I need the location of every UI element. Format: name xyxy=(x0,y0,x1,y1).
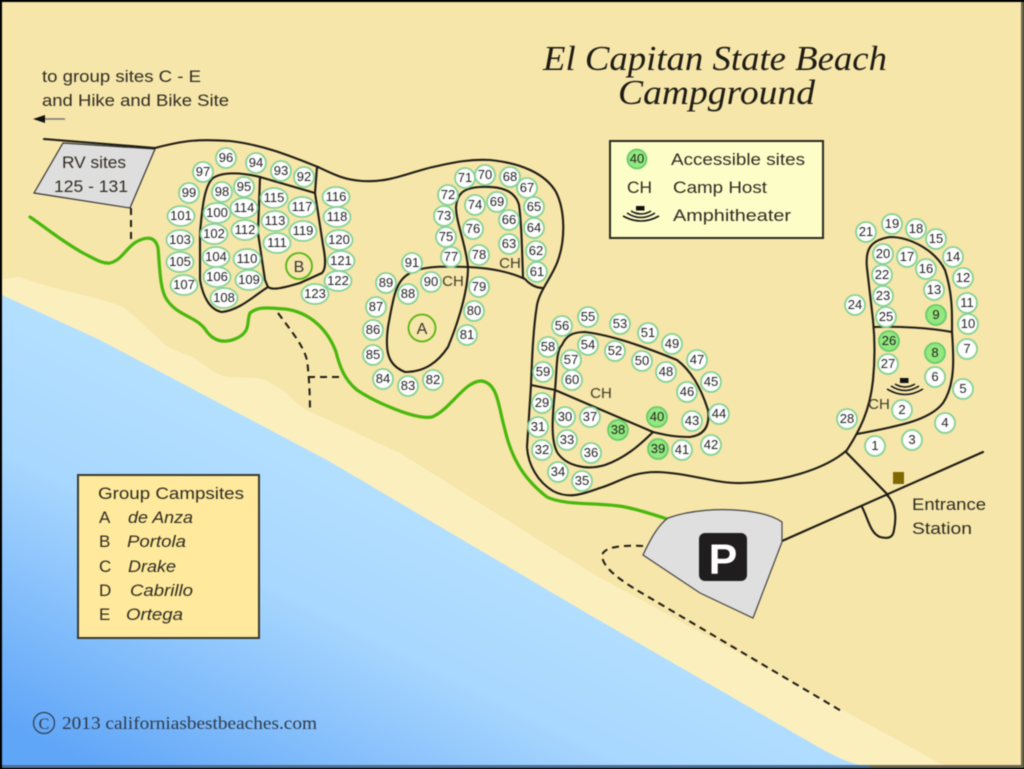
campsites east loop: 22 xyxy=(875,267,889,282)
icon: amphitheater on map xyxy=(887,378,923,394)
camp host labels: CH xyxy=(868,396,890,413)
campsites center loop: 40 xyxy=(650,409,664,424)
campsites east loop: 6 xyxy=(931,369,939,384)
campsites east loop: 7 xyxy=(963,341,971,356)
campsites center loop: 37 xyxy=(583,409,597,424)
group campsites box: Portola xyxy=(127,532,186,551)
campsites east loop: 14 xyxy=(946,249,960,264)
campsites east loop: 26 xyxy=(882,333,896,348)
campsites east loop: 27 xyxy=(881,356,895,371)
group campsites box: Ortega xyxy=(126,605,183,624)
campsites A loop: 80 xyxy=(467,303,481,318)
campsites A loop: 70 xyxy=(478,167,492,182)
campsites center loop: 41 xyxy=(675,442,689,457)
campsites A loop: 84 xyxy=(376,371,390,386)
campsites A loop: 87 xyxy=(369,299,383,314)
campsites B loop: 114 xyxy=(234,200,254,215)
campsites B loop: 109 xyxy=(238,272,260,287)
campsites A loop: 63 xyxy=(502,236,516,251)
campsites B loop: 111 xyxy=(267,235,287,250)
campsites B loop: 102 xyxy=(203,226,225,241)
campsites east loop: 25 xyxy=(879,309,893,324)
camp host labels: CH xyxy=(442,273,464,290)
direction note: group sites: to group sites C - E xyxy=(42,67,201,86)
campsites B loop: 113 xyxy=(265,213,285,228)
icon: entrance station marker xyxy=(893,472,904,484)
group campsites box: de Anza xyxy=(128,508,193,527)
parking lot xyxy=(643,510,782,618)
campsites B loop: 119 xyxy=(293,223,313,238)
campsites east loop: 28 xyxy=(840,411,854,426)
campsites A loop: 64 xyxy=(527,220,541,235)
campsites east loop: 21 xyxy=(859,224,873,239)
legend: camp host: CH xyxy=(627,178,652,197)
campsites center loop: 54 xyxy=(581,337,595,352)
campsites center loop: 52 xyxy=(608,343,622,358)
legend xyxy=(610,141,823,238)
camp host labels: CH xyxy=(590,385,612,402)
campsites east loop: 15 xyxy=(929,231,943,246)
campsites center loop: 31 xyxy=(531,419,545,434)
campsites B loop: 93 xyxy=(274,163,288,178)
campsites A loop: 61 xyxy=(530,264,544,279)
campsites B loop: 116 xyxy=(326,189,346,204)
campsites east loop: 4 xyxy=(941,415,949,430)
copyright: 2013 californiasbestbeaches.com xyxy=(62,713,317,733)
campsites A loop: 88 xyxy=(401,286,415,301)
legend: amphitheater: Amphitheater xyxy=(673,206,791,225)
campsites east loop: 19 xyxy=(885,216,899,231)
campsites A loop: 74 xyxy=(468,197,482,212)
campsites A loop: 86 xyxy=(366,322,380,337)
campsites B loop: 108 xyxy=(213,290,235,305)
campsites B loop: 101 xyxy=(170,208,192,223)
campsites B loop: 107 xyxy=(173,277,195,292)
campsites B loop: 96 xyxy=(219,150,233,165)
campsites center loop: 35 xyxy=(575,473,589,488)
campsites center loop: 55 xyxy=(581,309,595,324)
campsites east loop: 11 xyxy=(960,295,974,310)
campsites B loop: 99 xyxy=(182,185,196,200)
campsites B loop xyxy=(166,148,354,308)
campsites center loop xyxy=(528,307,729,491)
campsites A loop: 78 xyxy=(472,247,486,262)
legend: amphitheater xyxy=(623,206,791,225)
ocean xyxy=(2,295,860,765)
campsites east loop: 3 xyxy=(908,432,916,447)
campsites center loop: 57 xyxy=(564,352,578,367)
campsites A loop: 81 xyxy=(460,327,474,342)
campsites center loop: 60 xyxy=(565,372,579,387)
direction note: group sites xyxy=(33,67,229,123)
group campsites box: E xyxy=(99,605,110,624)
group campsites box: D xyxy=(99,581,111,600)
entrance station label xyxy=(912,495,986,538)
campsites A loop: 75 xyxy=(439,229,453,244)
campsites A loop: 89 xyxy=(379,275,393,290)
campsites B loop: 104 xyxy=(205,249,227,264)
campsites east loop: 18 xyxy=(909,221,923,236)
campsites center loop: 38 xyxy=(611,422,625,437)
campsites B loop: 106 xyxy=(206,269,228,284)
legend: camp host xyxy=(627,178,767,197)
legend: accessible sites: 40 xyxy=(630,151,644,166)
campsites A loop: 82 xyxy=(426,372,440,387)
campsites A loop: 65 xyxy=(527,199,541,214)
campsites east loop: 5 xyxy=(959,381,967,396)
campsites center loop: 32 xyxy=(535,442,549,457)
campsites east loop xyxy=(837,214,978,456)
campsites center loop: 44 xyxy=(712,406,726,421)
campsites A loop: 91 xyxy=(405,255,419,270)
campsites A loop: 77 xyxy=(444,249,458,264)
campsites A loop: 85 xyxy=(366,347,380,362)
campsites center loop: 45 xyxy=(704,374,718,389)
campsites center loop: 51 xyxy=(641,325,655,340)
campsites east loop: 16 xyxy=(919,261,933,276)
legend: accessible sites xyxy=(628,150,805,169)
group campsites box: Cabrillo xyxy=(130,581,193,600)
group campsites box xyxy=(78,475,259,638)
campsites center loop: 58 xyxy=(541,339,555,354)
campsites B loop: 122 xyxy=(327,273,349,288)
campsites center loop: 34 xyxy=(551,464,565,479)
campsites B loop: 118 xyxy=(327,209,347,224)
RV sites area: 125 - 131 xyxy=(54,177,128,196)
group site markers xyxy=(286,253,436,342)
campsites center loop: 30 xyxy=(558,409,572,424)
legend: accessible sites: Accessible sites xyxy=(671,150,805,169)
campsites east loop: 1 xyxy=(871,438,879,453)
icon: parking sign: P xyxy=(709,536,737,584)
group campsites box: B xyxy=(99,532,110,551)
campsites center loop: 29 xyxy=(535,395,549,410)
campsites center loop: 48 xyxy=(659,364,673,379)
campsites A loop: 72 xyxy=(441,187,455,202)
campsites east loop: 10 xyxy=(961,316,975,331)
campsites east loop: 13 xyxy=(927,282,941,297)
title xyxy=(542,39,887,112)
campsites A loop: 73 xyxy=(437,208,451,223)
campsites A loop: 90 xyxy=(424,274,438,289)
campsites center loop: 36 xyxy=(584,445,598,460)
campsites center loop: 33 xyxy=(560,432,574,447)
campsites B loop: 95 xyxy=(237,179,251,194)
legend: camp host: Camp Host xyxy=(673,178,767,197)
campsites A loop: 69 xyxy=(490,194,504,209)
campsites A loop xyxy=(363,165,547,396)
campsites center loop: 42 xyxy=(704,437,718,452)
campsites east loop: 20 xyxy=(876,246,890,261)
RV sites area: RV sites xyxy=(62,153,126,172)
group site markers: A xyxy=(417,321,428,338)
RV sites area xyxy=(34,143,155,208)
campsites east loop: 2 xyxy=(898,402,906,417)
campsites B loop: 120 xyxy=(328,232,350,247)
campsites east loop: 12 xyxy=(956,270,970,285)
group campsites box: A xyxy=(99,508,111,527)
title: Campground xyxy=(618,73,816,112)
campsites B loop: 123 xyxy=(304,286,326,301)
campsites B loop: 112 xyxy=(235,222,255,237)
group campsites box: Drake xyxy=(128,557,176,576)
campsites B loop: 98 xyxy=(215,184,229,199)
entrance station label: Station xyxy=(912,519,972,538)
campsites east loop: 23 xyxy=(876,288,890,303)
campsites A loop: 79 xyxy=(472,279,486,294)
group site markers: B xyxy=(294,259,304,276)
campsites B loop: 100 xyxy=(206,205,228,220)
entrance station label: Entrance xyxy=(912,495,986,514)
campsites B loop: 92 xyxy=(297,169,311,184)
campsites east loop: 8 xyxy=(931,345,939,360)
group campsites box: C xyxy=(99,557,111,576)
campsites B loop: 121 xyxy=(330,253,352,268)
campsites B loop: 103 xyxy=(169,232,191,247)
campsites B loop: 105 xyxy=(169,254,191,269)
copyright: C xyxy=(39,716,49,733)
campsites B loop: 110 xyxy=(237,251,257,266)
campsites center loop: 49 xyxy=(665,336,679,351)
campsites A loop: 83 xyxy=(401,378,415,393)
main road network xyxy=(44,139,983,541)
campsites A loop: 68 xyxy=(503,169,517,184)
campsites center loop: 43 xyxy=(685,413,699,428)
campsites center loop: 53 xyxy=(613,316,627,331)
campsites east loop: 24 xyxy=(848,297,862,312)
campsites center loop: 47 xyxy=(690,352,704,367)
direction note: group sites: and Hike and Bike Site xyxy=(42,91,229,110)
light sand band xyxy=(2,277,943,765)
campsites center loop: 56 xyxy=(555,318,569,333)
campsites B loop: 115 xyxy=(264,190,284,205)
hiking trail xyxy=(30,217,667,519)
campsites B loop: 94 xyxy=(249,155,263,170)
campsites center loop: 59 xyxy=(536,364,550,379)
campsites A loop: 67 xyxy=(520,180,534,195)
campsites A loop: 62 xyxy=(529,243,543,258)
campsites east loop: 17 xyxy=(900,249,914,264)
campsites A loop: 76 xyxy=(466,221,480,236)
campsites center loop: 46 xyxy=(680,384,694,399)
camp host labels: CH xyxy=(499,255,521,272)
dashed footpaths xyxy=(131,208,843,712)
campsites center loop: 39 xyxy=(651,441,665,456)
title: El Capitan State Beach xyxy=(542,39,887,78)
campsites A loop: 71 xyxy=(458,170,472,185)
campsites east loop: 9 xyxy=(932,307,940,322)
campsites B loop: 97 xyxy=(196,164,210,179)
camp host labels xyxy=(442,255,890,413)
group campsites box: Group Campsites xyxy=(98,484,244,503)
campsites center loop: 50 xyxy=(635,353,649,368)
campsites A loop: 66 xyxy=(502,212,516,227)
campsites B loop: 117 xyxy=(292,199,312,214)
